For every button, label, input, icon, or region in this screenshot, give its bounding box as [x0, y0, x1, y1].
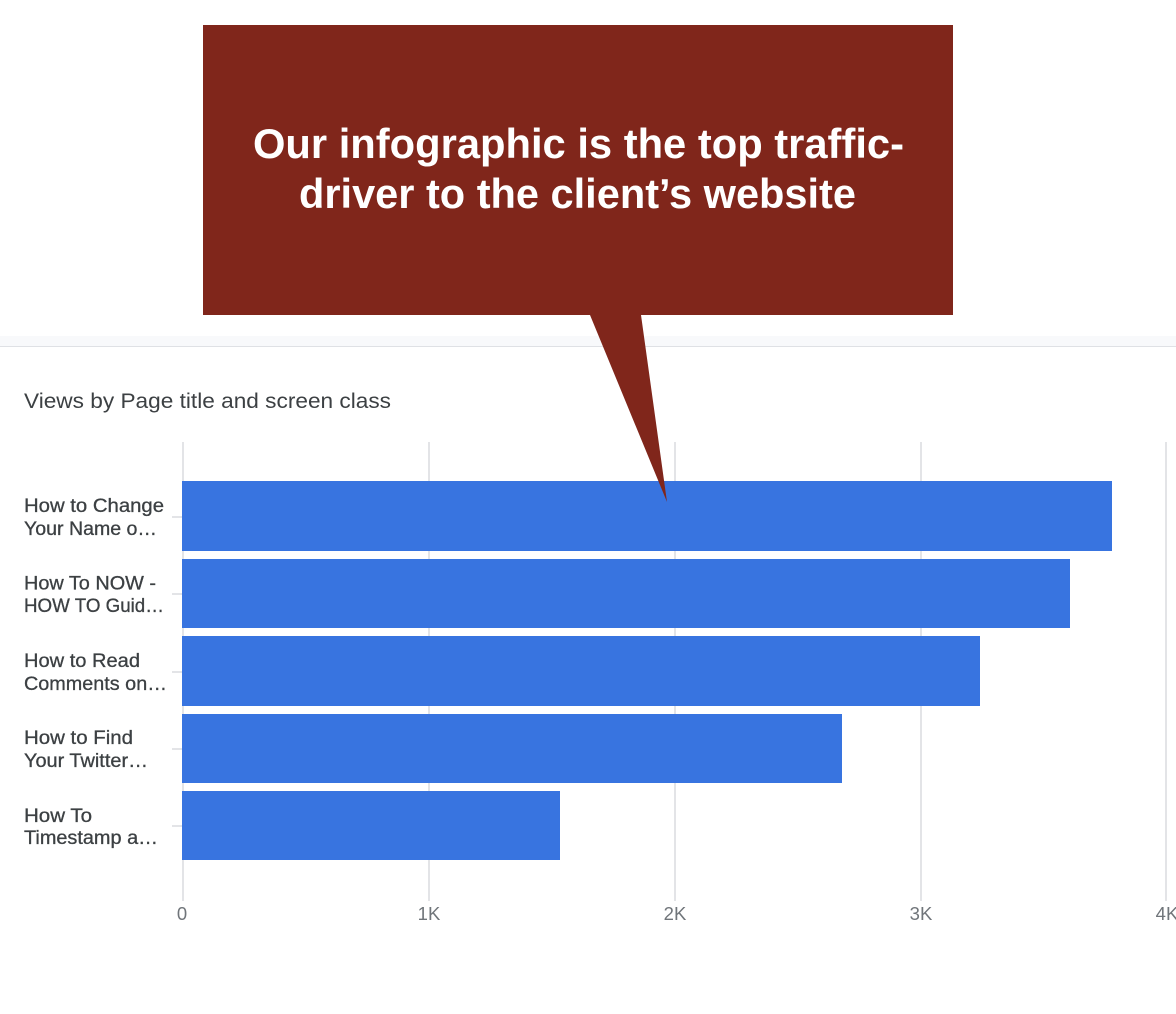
- category labels: How to Find: [24, 727, 133, 749]
- x axis labels: 2K: [664, 903, 687, 924]
- category labels: HOW TO Guid…: [24, 595, 164, 617]
- x axis labels: 0: [177, 903, 187, 924]
- callout text: Our infographic is the top traffic-: [253, 120, 904, 167]
- chart title: Views by Page title and screen class: [24, 389, 391, 413]
- category labels: How to Change: [24, 495, 164, 517]
- category labels: Timestamp a…: [24, 827, 158, 849]
- category labels: How to Read: [24, 650, 140, 672]
- callout: [203, 25, 953, 502]
- x axis labels: 3K: [910, 903, 933, 924]
- category labels: [24, 495, 167, 849]
- category labels: Your Twitter…: [24, 750, 148, 772]
- callout text: [253, 120, 904, 217]
- x axis labels: [177, 903, 1176, 924]
- x axis labels: 1K: [418, 903, 441, 924]
- category labels: Your Name o…: [24, 518, 157, 540]
- category labels: How To: [24, 805, 92, 827]
- bar chart: [24, 442, 1176, 924]
- category labels: How To NOW -: [24, 572, 156, 594]
- bars: [182, 481, 1112, 860]
- callout text: driver to the client’s website: [299, 170, 856, 217]
- category labels: Comments on…: [24, 673, 167, 695]
